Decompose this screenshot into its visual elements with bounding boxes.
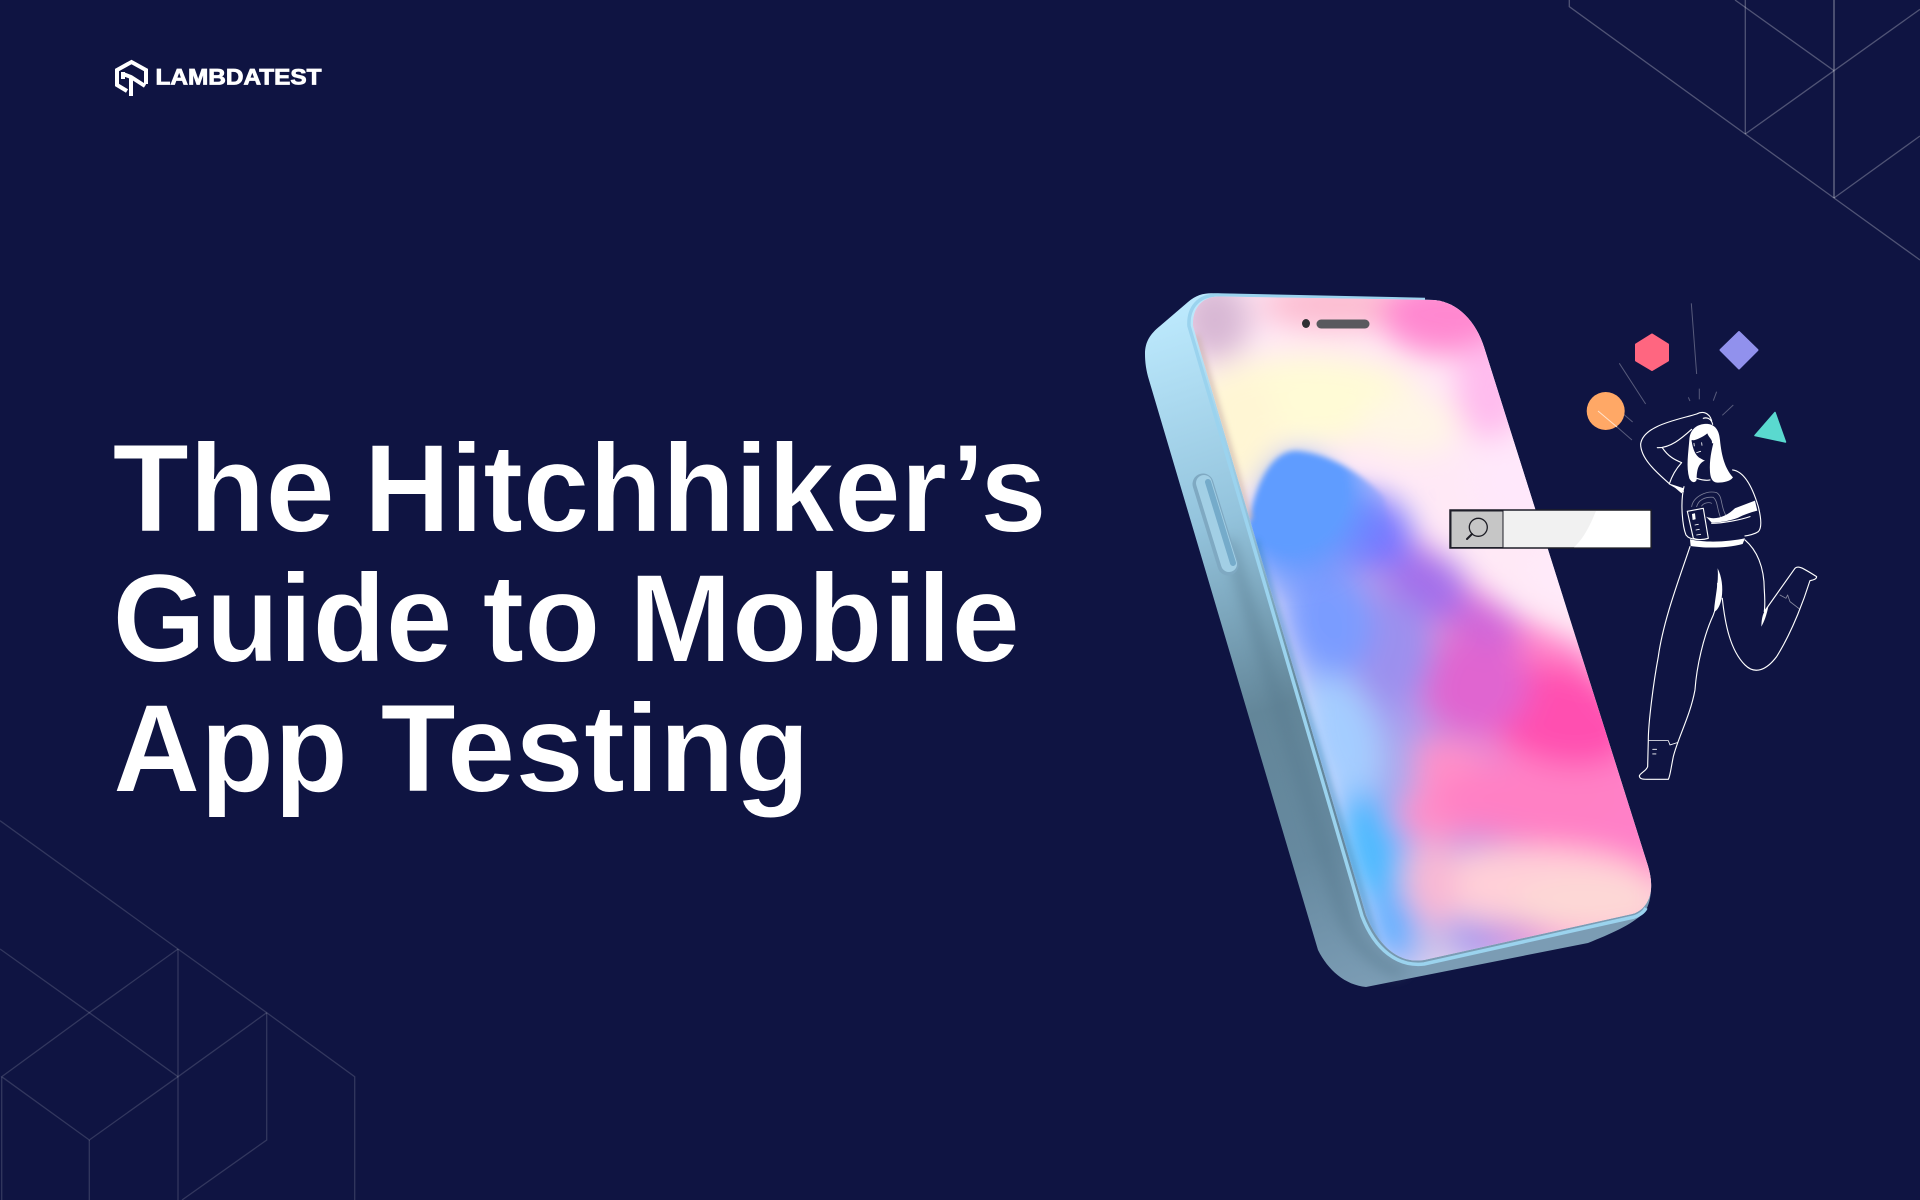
leg highlights xyxy=(1714,568,1722,612)
title: Hitchhiker’s xyxy=(364,420,1046,559)
handheld phone xyxy=(1687,508,1708,540)
title: App xyxy=(113,680,348,819)
search icon box xyxy=(1451,511,1503,548)
phone illustration xyxy=(1145,275,1670,987)
icon: red hexagon xyxy=(1636,334,1668,370)
title: Mobile xyxy=(629,550,1020,689)
face xyxy=(1692,433,1712,459)
torso xyxy=(1682,470,1761,539)
facial features xyxy=(1694,443,1702,453)
title: Guide xyxy=(112,550,452,689)
earpiece camera dot xyxy=(1302,319,1310,328)
standing leg xyxy=(1639,547,1718,779)
icon: orange circle xyxy=(1587,392,1625,430)
hem xyxy=(1690,538,1745,548)
woman line illustration xyxy=(1639,412,1817,779)
screen colour mesh xyxy=(1193,296,1652,960)
search bar xyxy=(1450,510,1651,548)
title: to xyxy=(482,550,600,689)
raised arm xyxy=(1641,412,1712,492)
title: The xyxy=(112,420,335,559)
screen gradient xyxy=(1192,296,1652,960)
bent leg xyxy=(1722,540,1817,670)
blue blob sharp edge xyxy=(1248,447,1386,598)
phone side shading xyxy=(1222,540,1410,978)
side button xyxy=(1203,482,1233,565)
hair xyxy=(1688,424,1733,483)
phone rim xyxy=(1189,295,1646,964)
search bar highlight xyxy=(1574,511,1650,547)
shirt print xyxy=(1692,492,1727,520)
icon: magnifier xyxy=(1467,518,1487,539)
logo wordmark: LAMBDATEST xyxy=(156,64,322,90)
icon: purple diamond xyxy=(1720,332,1758,368)
icon: LambdaTest hexagon mark xyxy=(117,62,146,96)
phone body xyxy=(1145,293,1651,987)
sleeve and forearm xyxy=(1706,501,1757,523)
logo xyxy=(117,62,322,96)
sleeve highlight xyxy=(1671,484,1684,493)
rays xyxy=(1617,303,1733,440)
floating shapes and rays xyxy=(1587,303,1786,442)
title: Testing xyxy=(380,680,810,819)
title xyxy=(112,420,1046,819)
geometric lattice: bottom left xyxy=(0,821,355,1200)
icon: teal triangle xyxy=(1755,412,1786,442)
earpiece speaker xyxy=(1316,320,1370,328)
geometric lattice: top right xyxy=(1569,0,1920,260)
lower filler xyxy=(1263,534,1652,960)
